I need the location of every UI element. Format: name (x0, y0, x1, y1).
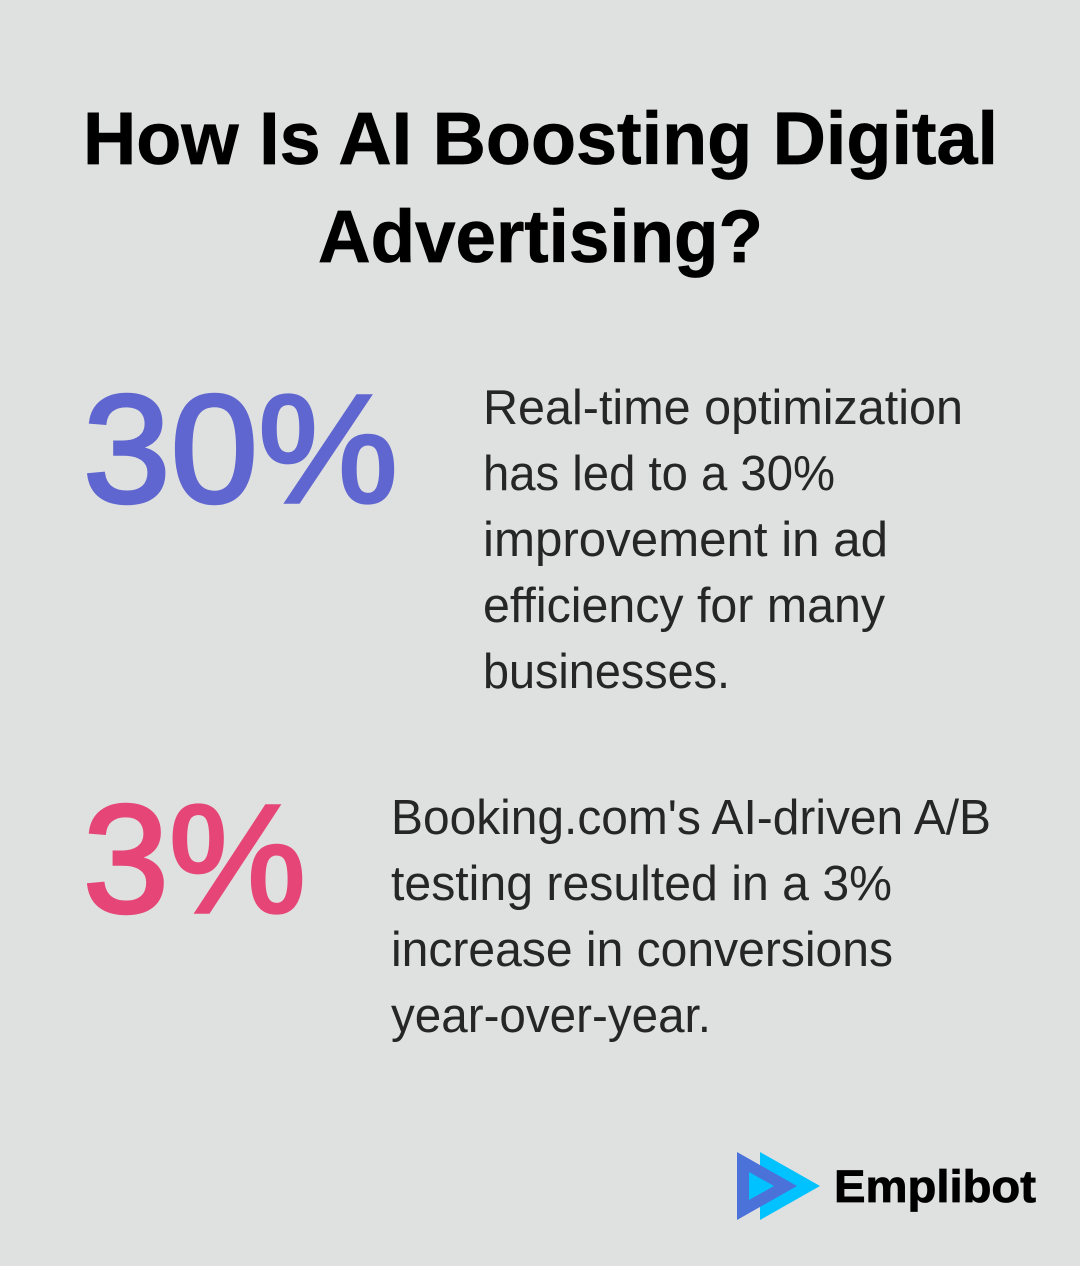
text block: real-time optimization: efficiency for many (483, 579, 885, 633)
text block: real-time optimization: has led to a 30% (483, 447, 835, 501)
text block: real-time optimization: Real-time optimization (483, 381, 963, 435)
icon: play triangles (737, 1152, 820, 1220)
title (83, 97, 998, 278)
panel: 3% statistic (83, 773, 991, 1043)
text block: Booking.com testing: Booking.com's AI-driven A/B (391, 791, 991, 845)
text block: Booking.com testing: year-over-year. (391, 989, 711, 1043)
text block: real-time optimization (483, 381, 963, 699)
text block: real-time optimization: improvement in ad (483, 513, 888, 567)
text block: Booking.com testing: testing resulted in a 3% (391, 857, 892, 911)
title: Advertising? (318, 195, 763, 278)
title: How Is AI Boosting Digital (83, 97, 998, 180)
stat number: 30%: 30% (83, 363, 398, 535)
panel: 30% statistic (83, 363, 963, 699)
text block: real-time optimization: businesses. (483, 645, 730, 699)
wordmark: Emplibot (834, 1161, 1036, 1212)
text block: Booking.com testing (391, 791, 991, 1043)
stat number: 3%: 3% (83, 773, 306, 945)
text block: Booking.com testing: increase in conversions (391, 923, 893, 977)
logo: Emplibot (737, 1152, 1036, 1220)
